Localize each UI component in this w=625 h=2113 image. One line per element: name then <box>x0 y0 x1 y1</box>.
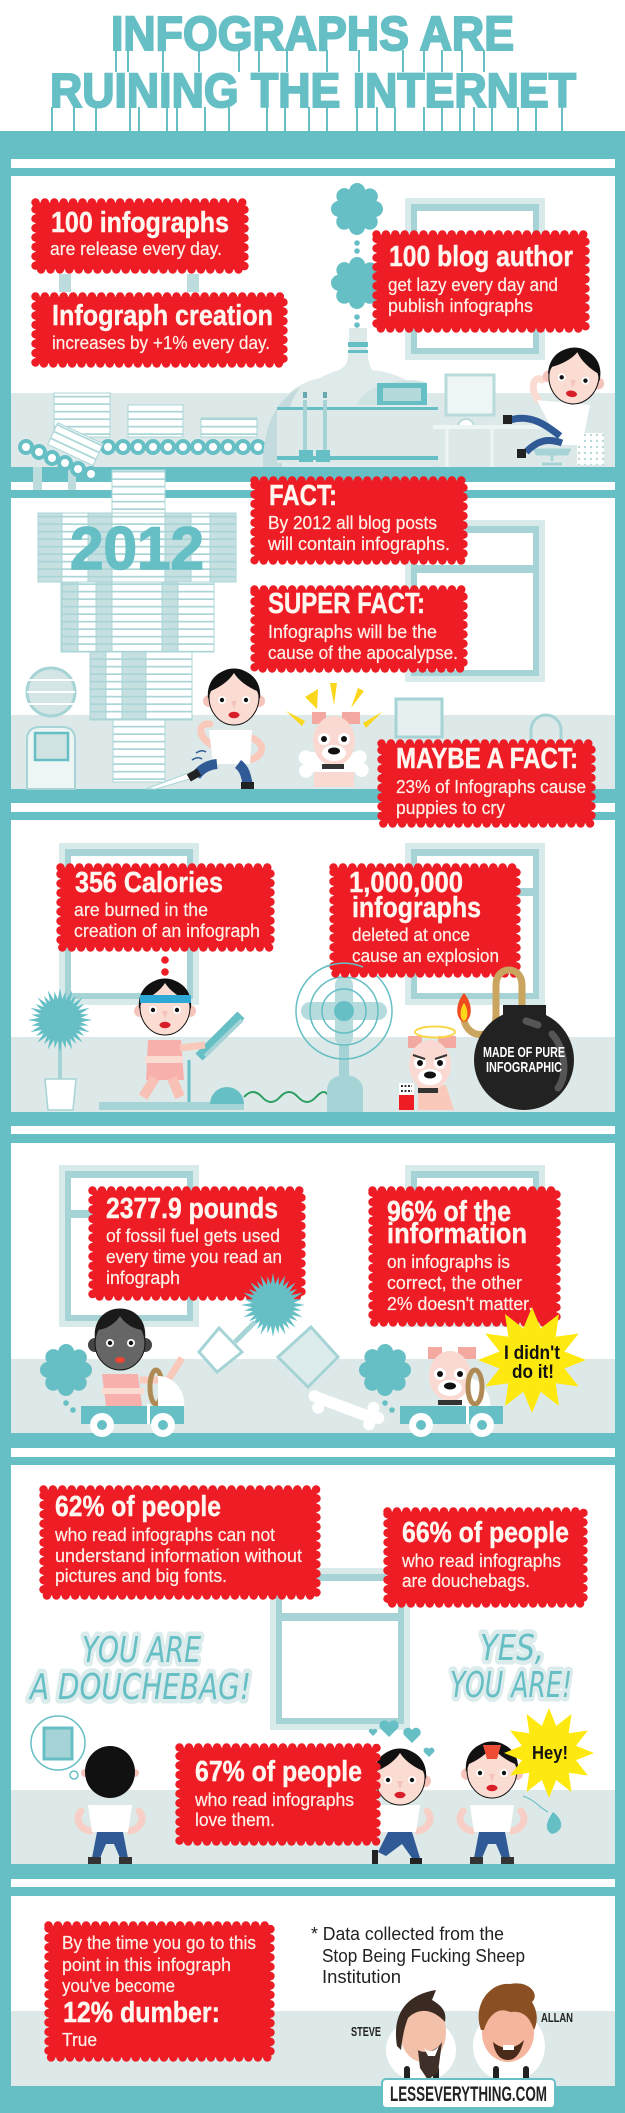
callout: 12 percent dumber: By the time you go to this <box>62 1933 256 1953</box>
treadmill <box>99 1015 244 1110</box>
callout: 2377.9 pounds: every time you read an <box>106 1247 282 1267</box>
lazy blog author <box>503 344 609 464</box>
dust burst and shovel <box>199 1271 307 1372</box>
panel: calories and explosion <box>11 820 615 1112</box>
callout: maybe a fact: 23% of Infographs cause <box>396 777 586 797</box>
callout: fact: By 2012 all blog posts <box>268 513 437 533</box>
callout: 12 percent dumber <box>48 1926 270 2058</box>
fan ring over callout <box>325 963 363 967</box>
callout: 96 percent: on infographs is <box>387 1252 510 1272</box>
callout: 2377.9 pounds: infograph <box>106 1268 180 1288</box>
callout: 1,000,000 infographs <box>334 867 516 974</box>
callout: maybe a fact <box>382 743 592 824</box>
callout: 62 percent: pictures and big fonts. <box>55 1566 227 1586</box>
conveyor belt <box>20 441 278 480</box>
panel: daily infographs factory <box>11 176 615 490</box>
speech star: I didn't do it: do it! <box>512 1362 554 1383</box>
startled puppy <box>286 683 382 787</box>
speech star: hey <box>504 1708 594 1798</box>
callout: 356 calories <box>60 867 270 948</box>
callout: 1,000,000 infographs: deleted at once <box>352 925 470 945</box>
giant stack of infographs <box>38 470 236 789</box>
bomb with lit fuse <box>457 970 574 1110</box>
machine <box>263 328 438 467</box>
thought bubble with picture <box>31 1716 85 1779</box>
callout: 62 percent: who read infographs can not <box>54 1525 275 1545</box>
potted plant <box>26 986 94 1110</box>
graffiti: yes, you are <box>450 1628 572 1706</box>
person in cart, smoke <box>48 1308 184 1437</box>
callout: 2377.9 pounds: of fossil fuel gets used <box>106 1226 280 1246</box>
person kicking <box>187 669 265 789</box>
title <box>50 8 576 131</box>
red can <box>399 1083 414 1110</box>
callout: 100 infographs <box>36 202 244 270</box>
callout: 1,000,000 infographs: 1,000,000 <box>349 867 463 899</box>
callout: 66 percent <box>388 1512 584 1604</box>
callout: maybe a fact: puppies to cry <box>396 798 505 818</box>
callout: infograph creation: increases by +1% every day. <box>52 333 270 353</box>
callout: 100 blog author: 100 blog author <box>389 241 573 273</box>
callout: 96 percent: correct, the other <box>387 1273 522 1293</box>
callout: 67 percent <box>180 1748 376 1842</box>
label: Allan: ALLAN <box>541 2010 573 2025</box>
desk and monitor <box>433 375 604 467</box>
callout: 100 infographs: 100 infographs <box>51 207 229 239</box>
callout: 66 percent: are douchebags. <box>402 1571 530 1591</box>
website badge <box>382 2079 555 2108</box>
speech star: I didn't do it: I didn't <box>504 1343 561 1364</box>
callout: super fact <box>254 588 464 668</box>
callout: super fact: cause of the apocalypse. <box>268 643 458 663</box>
bomb with lit fuse: INFOGRAPHIC <box>486 1059 562 1076</box>
2012 label: 2012 <box>70 515 204 582</box>
callout: 62 percent: understand information without <box>55 1546 302 1566</box>
footnote: Institution <box>322 1967 401 1987</box>
title: RUINING THE INTERNET <box>50 65 576 118</box>
callout: 1,000,000 infographs: infographs <box>352 892 481 924</box>
callout: 1,000,000 infographs: cause an explosion <box>352 946 499 966</box>
callout: 356 calories: are burned in the <box>74 900 208 920</box>
callout: super fact: Infographs will be the <box>268 622 437 642</box>
label: Steve: STEVE <box>351 2024 381 2039</box>
callout: infograph creation <box>36 296 284 364</box>
callout: 96 percent: information <box>387 1218 527 1250</box>
green power cord <box>244 1092 329 1102</box>
callout: 66 percent: 66% of people <box>402 1517 569 1549</box>
jogging person <box>134 956 205 1097</box>
graffiti: yes, you are: YES, <box>480 1628 544 1669</box>
speech star: hey: Hey! <box>532 1743 568 1763</box>
callout: 100 blog author: publish infographs <box>388 296 533 316</box>
flying monitor and bone <box>278 1327 384 1430</box>
callout: 12 percent dumber: True <box>62 2030 97 2050</box>
callout: 100 blog author: get lazy every day and <box>388 275 558 295</box>
footnote <box>311 1924 525 1987</box>
callout: maybe a fact: MAYBE A FACT: <box>396 743 578 775</box>
graffiti: you are a douchebag <box>28 1630 251 1708</box>
speech star: I didn't do it <box>478 1307 586 1413</box>
graffiti: yes, you are: YOU ARE! <box>450 1665 572 1706</box>
callout: 356 calories: 356 Calories <box>75 867 223 899</box>
caricature: Allan <box>473 1983 545 2082</box>
callout: infograph creation: Infograph creation <box>52 300 273 332</box>
callout: 2377.9 pounds: 2377.9 pounds <box>106 1193 278 1225</box>
bomb with lit fuse: MADE OF PURE <box>483 1044 565 1061</box>
footnote: * Data collected from the <box>311 1924 504 1944</box>
callout: 96 percent: 96% of the <box>387 1196 511 1228</box>
callout: 67 percent: 67% of people <box>195 1756 362 1788</box>
callout: 67 percent: love them. <box>195 1810 275 1830</box>
alarm rays <box>286 683 382 728</box>
person in love with hearts <box>366 1720 434 1864</box>
smoke clouds <box>339 191 375 328</box>
callout: 66 percent: who read infographs <box>401 1551 561 1571</box>
tilted paper stack <box>48 423 103 466</box>
callout: 12 percent dumber: 12% dumber: <box>63 1997 220 2029</box>
callout: 96 percent: 2% doesn't matter. <box>387 1294 533 1314</box>
panel: 2012 facts <box>11 470 615 789</box>
electric fan <box>296 963 392 1112</box>
angry person <box>460 1708 594 1864</box>
connectors between boxes <box>33 274 199 490</box>
footnote: Stop Being Fucking Sheep <box>322 1946 525 1966</box>
small monitor and arch <box>396 699 561 745</box>
callout: fact: FACT: <box>269 480 337 512</box>
callout: 62 percent <box>44 1490 316 1596</box>
callout: 67 percent: who read infographs <box>194 1790 354 1810</box>
title: INFOGRAPHS ARE <box>111 8 514 61</box>
graffiti: you are a douchebag: A DOUCHEBAG! <box>28 1667 251 1708</box>
callout: 12 percent dumber: you've become <box>62 1976 175 1996</box>
graffiti: you are a douchebag: YOU ARE <box>82 1630 201 1671</box>
callout: 12 percent dumber: point in this infograph <box>62 1955 231 1975</box>
water cooler <box>27 668 75 789</box>
caricature: Steve <box>386 1990 456 2082</box>
callout: 2377.9 pounds <box>92 1190 302 1296</box>
paper stacks <box>54 393 257 437</box>
white divider strips <box>11 159 615 1887</box>
puppy in cart, smoke <box>367 1347 503 1437</box>
callout: fact: will contain infographs. <box>267 534 450 554</box>
callout: 100 blog author <box>376 234 586 328</box>
panel: fossil fuel and accuracy <box>11 1143 615 1437</box>
person seen from behind <box>78 1746 142 1864</box>
callout: fact <box>254 480 464 560</box>
callout: 96 percent <box>372 1190 556 1322</box>
callout: 356 calories: creation of an infograph <box>74 921 260 941</box>
callout: 100 infographs: are release every day. <box>50 239 222 259</box>
panel: conclusion <box>11 1896 615 2108</box>
panel: percentages of people <box>11 1465 615 1864</box>
callout: 62 percent: 62% of people <box>55 1491 221 1523</box>
angel dog <box>408 1026 456 1110</box>
callout: super fact: SUPER FACT: <box>268 588 425 620</box>
